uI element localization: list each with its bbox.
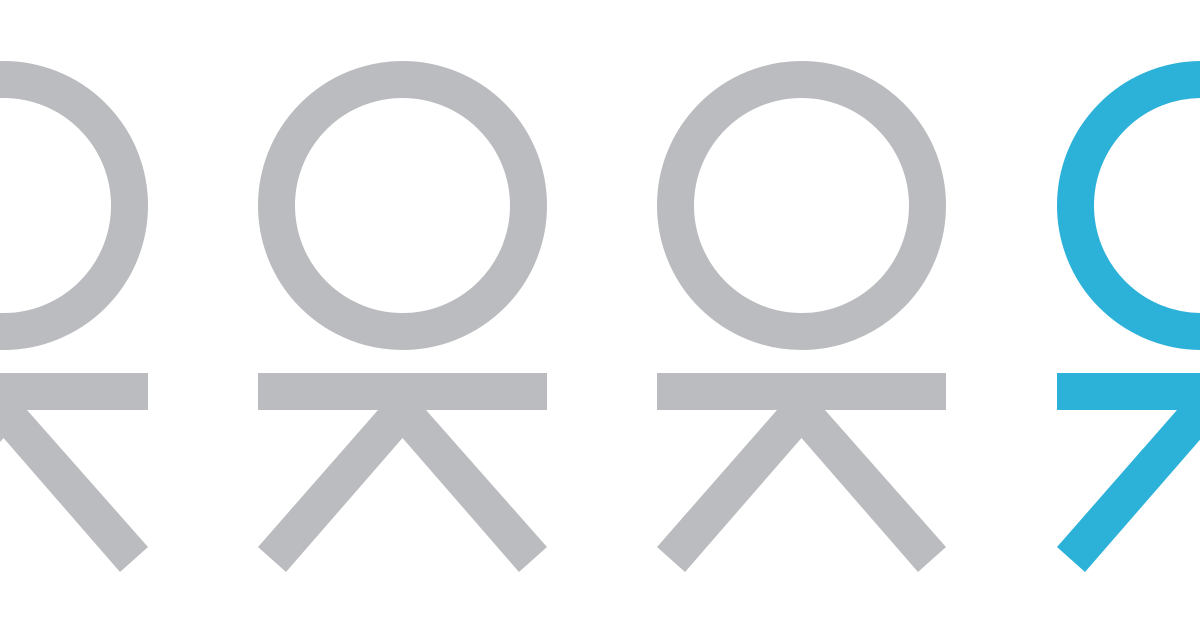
icon: grey person 1 (cropped at left edge) xyxy=(0,80,148,572)
icon: grey person 2 xyxy=(258,80,547,572)
icon: blue person 4 (cropped at right edge) xyxy=(1057,80,1200,572)
icon: grey person 3 xyxy=(657,80,946,572)
